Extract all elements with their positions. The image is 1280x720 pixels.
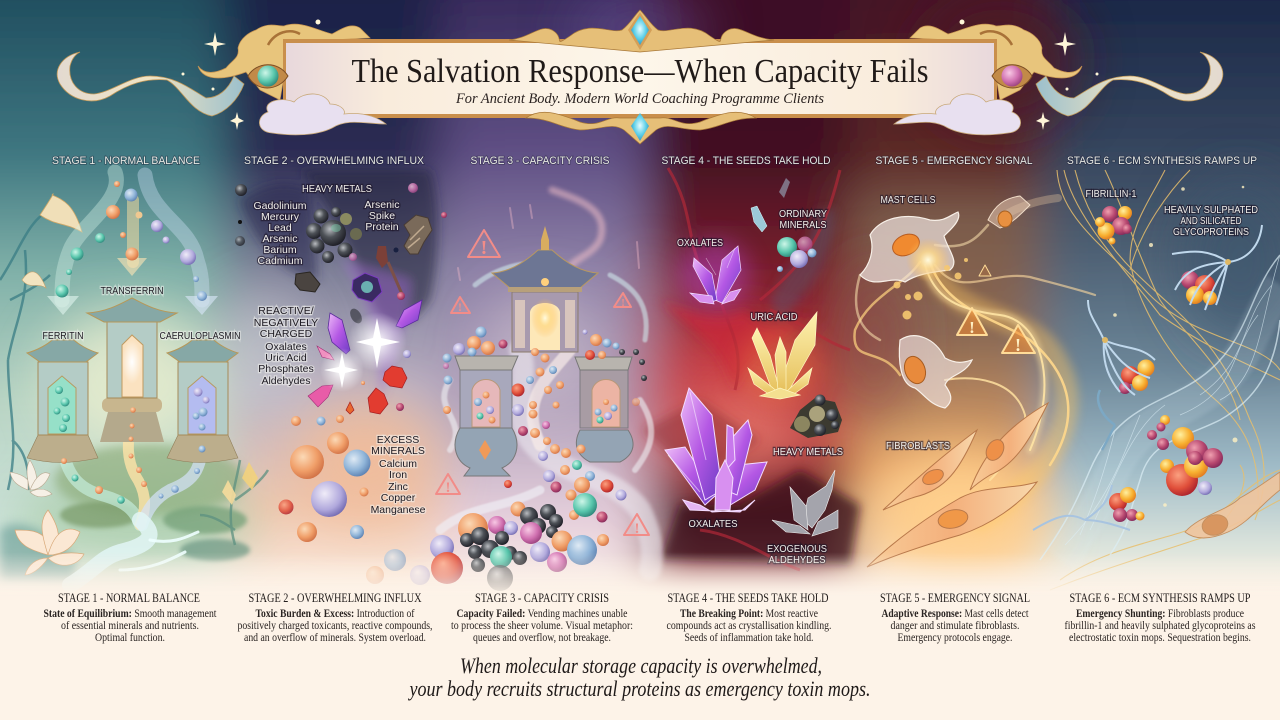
flow streams into stores xyxy=(62,172,202,585)
labels: ORDINARY xyxy=(779,208,827,220)
panel: stage 5 emergency signal xyxy=(854,194,1095,567)
labels: Arsenic xyxy=(364,199,400,211)
labels xyxy=(880,194,950,452)
labels: AND SILICATED xyxy=(1180,215,1242,227)
bottom fade into cream xyxy=(0,552,1280,596)
cloud: right xyxy=(894,94,1021,135)
warning marks xyxy=(969,318,1021,355)
caption: stage 1: STAGE 1 - NORMAL BALANCE xyxy=(58,591,200,605)
caption: stage 4: compounds act as crystallisation kindling. xyxy=(666,620,832,632)
pavilion: caeruloplasmin xyxy=(167,340,238,462)
caption: stage 3 xyxy=(451,591,633,644)
panel: stage 1 normal balance xyxy=(0,172,268,585)
labels: Arsenic xyxy=(262,233,298,245)
caption: stage 5: STAGE 5 - EMERGENCY SIGNAL xyxy=(880,591,1030,605)
caption: stage 3: STAGE 3 - CAPACITY CRISIS xyxy=(475,591,609,605)
labels: FIBRILLIN-1 xyxy=(1086,188,1137,200)
caption: stage 2: Toxic Burden & Excess: Introduction of xyxy=(256,608,415,620)
arrowheads xyxy=(47,258,218,315)
labels: MINERALS xyxy=(371,445,425,457)
labels xyxy=(1086,188,1258,238)
labels: Copper xyxy=(381,492,416,504)
fibroblasts xyxy=(867,403,1048,567)
purple crystals xyxy=(328,300,422,354)
mast cell: lower xyxy=(899,336,972,408)
minerals in transit xyxy=(56,181,207,504)
caption: stage 2: positively charged toxicants, reactive compounds, xyxy=(238,620,433,632)
mesh net xyxy=(1040,255,1280,560)
caption: stage 1: Optimal function. xyxy=(95,632,165,644)
labels: Iron xyxy=(389,469,407,481)
caption: stage 6: Emergency Shunting: Fibroblasts produce xyxy=(1076,608,1244,620)
caption: stage 2 xyxy=(238,591,433,644)
pavilion: transferrin xyxy=(87,298,177,442)
pink shards xyxy=(308,346,334,407)
closing statement: When molecular storage capacity is overwhelmed, xyxy=(460,653,822,678)
caption: stage 6: fibrillin-1 and heavily sulphated glycoproteins as xyxy=(1064,620,1256,632)
mast cell: distant xyxy=(988,196,1030,228)
glycoprotein mop: lower xyxy=(1033,390,1144,530)
granules xyxy=(894,258,968,320)
labels: OXALATES xyxy=(677,237,723,249)
mast cell: large xyxy=(860,212,959,282)
caption: stage 6 xyxy=(1064,591,1256,644)
labels: URIC ACID xyxy=(750,311,798,323)
caption: stage 5: Emergency protocols engage. xyxy=(898,632,1013,644)
labels: ALDEHYDES xyxy=(768,554,826,566)
caption: stage 2: STAGE 2 - OVERWHELMING INFLUX xyxy=(248,591,422,605)
warning triangles xyxy=(436,230,649,535)
labels: HEAVY METALS xyxy=(302,183,372,195)
red clusters xyxy=(346,366,407,414)
excess mineral spheres xyxy=(278,350,430,585)
labels: MAST CELLS xyxy=(880,194,936,206)
pagoda lantern xyxy=(492,226,598,352)
oxalate crystal: large xyxy=(665,388,767,512)
labels: REACTIVE/ xyxy=(258,305,314,317)
ornament: top xyxy=(509,10,774,52)
labels xyxy=(677,208,843,566)
uric acid crystal xyxy=(748,312,817,399)
gold flourish: left xyxy=(198,24,370,100)
caption: stage 4: Seeds of inflammation take hold. xyxy=(684,632,814,644)
pile of spheres xyxy=(430,493,609,591)
cloud: left xyxy=(259,94,386,135)
labels: Spike xyxy=(369,210,395,222)
spike protein fragment xyxy=(404,215,432,254)
warning marks: ! xyxy=(1015,335,1021,355)
sparkles xyxy=(182,20,1098,130)
storage jar: left xyxy=(455,356,518,476)
closing statement xyxy=(408,653,870,701)
swirling smoke xyxy=(440,190,652,570)
labels: Protein xyxy=(365,221,399,233)
subtitle: For Ancient Body. Modern World Coaching Programme Clients xyxy=(455,91,824,107)
labels: Uric Acid xyxy=(265,352,307,364)
panel: stage 3 capacity crisis xyxy=(430,190,652,591)
gold flourish: right xyxy=(910,24,1082,100)
warning marks: ! xyxy=(446,480,450,496)
labels: FIBROBLASTS xyxy=(886,440,950,452)
stage headings, top row: STAGE 2 - OVERWHELMING INFLUX xyxy=(244,155,425,167)
burst stars xyxy=(320,312,407,392)
labels: Mercury xyxy=(261,211,300,223)
fibrillin-1 cluster xyxy=(1095,206,1132,244)
labels: FERRITIN xyxy=(42,330,84,342)
storage jar: right xyxy=(575,357,633,462)
labels: HEAVILY SULPHATED xyxy=(1164,204,1258,216)
labels: Lead xyxy=(268,222,292,234)
caption: stage 4: The Breaking Point: Most reactive xyxy=(680,608,818,620)
labels: Manganese xyxy=(371,504,426,516)
labels: Zinc xyxy=(388,481,408,493)
labels xyxy=(42,285,240,342)
labels: OXALATES xyxy=(688,518,738,530)
labels: EXCESS xyxy=(377,434,419,446)
caption: stage 4: STAGE 4 - THE SEEDS TAKE HOLD xyxy=(668,591,829,605)
labels: Cadmium xyxy=(258,255,303,267)
stage headings, top row: STAGE 4 - THE SEEDS TAKE HOLD xyxy=(662,155,831,167)
glowing backdrop xyxy=(680,240,822,403)
caption: stage 1: of essential minerals and nutrients. xyxy=(61,620,199,632)
labels: Gadolinium xyxy=(253,200,307,212)
ornament: bottom xyxy=(526,112,756,144)
aldehydes crystal xyxy=(772,470,838,536)
small drifting particles xyxy=(235,183,447,300)
labels: EXOGENOUS xyxy=(767,543,827,555)
warning marks: ! xyxy=(621,298,625,309)
ordinary minerals xyxy=(751,178,816,272)
warning triangles xyxy=(957,265,1035,353)
caption: stage 1 xyxy=(44,591,217,644)
caption: stage 5: danger and stimulate fibroblasts. xyxy=(890,620,1020,632)
caption: stage 3: queues and overflow, not breakage. xyxy=(473,632,611,644)
meadow and plants xyxy=(0,194,268,580)
stage headings, top row: STAGE 5 - EMERGENCY SIGNAL xyxy=(876,155,1032,167)
caption: stage 6: electrostatic toxin mops. Sequestration begins. xyxy=(1069,632,1251,644)
sequestered cluster: large xyxy=(1147,415,1223,496)
warning marks: ! xyxy=(634,521,640,537)
banner plaque xyxy=(283,39,997,118)
overflowing spheres xyxy=(442,326,647,522)
gold fibres xyxy=(1050,170,1280,590)
caption: stage 1: State of Equilibrium: Smooth management xyxy=(44,608,217,620)
labels: Calcium xyxy=(379,458,417,470)
glycoprotein mop: middle xyxy=(1088,300,1155,395)
panel: stage 4 the seeds take hold xyxy=(665,178,843,566)
oxalate crystal: small xyxy=(690,246,741,304)
pavilion: ferritin xyxy=(27,340,98,462)
labels: MINERALS xyxy=(780,219,826,231)
gem: green xyxy=(248,65,288,88)
heavy metals rock xyxy=(790,394,842,438)
cream footer xyxy=(0,596,1280,720)
stage headings, top row xyxy=(52,155,1257,167)
caption: stage 5: Adaptive Response: Mast cells detect xyxy=(882,608,1029,620)
caption: stage 3: to process the sheer volume. Visual metaphor: xyxy=(451,620,633,632)
warning marks: ! xyxy=(969,318,975,337)
energy streams xyxy=(854,198,1095,520)
labels: TRANSFERRIN xyxy=(100,285,164,297)
labels: Barium xyxy=(263,244,297,256)
panel: stage 6 ecm synthesis ramps up xyxy=(1033,170,1280,590)
labels: NEGATIVELY xyxy=(254,317,318,329)
labels: CHARGED xyxy=(260,328,313,340)
caption: stage 4 xyxy=(666,591,832,644)
warning marks xyxy=(446,237,640,537)
glints xyxy=(1113,186,1244,507)
glycoprotein mop: upper xyxy=(1172,225,1262,310)
labels: Oxalates xyxy=(265,341,307,353)
dark fragments xyxy=(295,272,382,325)
stage headings, top row: STAGE 3 - CAPACITY CRISIS xyxy=(470,155,610,167)
ribbon: left xyxy=(57,52,244,116)
caption: stage 5 xyxy=(880,591,1030,644)
labels: Phosphates xyxy=(258,363,314,375)
heavy metal cluster xyxy=(306,207,362,263)
caption: stage 2: and an overflow of minerals. System overload. xyxy=(244,632,426,644)
fibroblast spindle xyxy=(1185,472,1280,538)
panel: stage 2 overwhelming influx xyxy=(235,183,447,585)
warning marks: ! xyxy=(458,300,462,314)
title: The Salvation Response—When Capacity Fails xyxy=(352,53,928,90)
gem: pink xyxy=(992,65,1032,88)
labels: Aldehydes xyxy=(261,375,311,387)
lotus flowers xyxy=(10,460,84,575)
warning marks: ! xyxy=(481,237,487,259)
labels: CAERULOPLASMIN xyxy=(160,330,240,342)
labels: GLYCOPROTEINS xyxy=(1173,226,1249,238)
labels xyxy=(253,183,426,516)
banner xyxy=(57,10,1223,144)
caption: stage 3: Capacity Failed: Vending machines unable xyxy=(456,608,628,620)
closing statement: your body recruits structural proteins as emergency toxin mops. xyxy=(408,676,870,701)
labels: HEAVY METALS xyxy=(773,446,843,458)
ribbon: right xyxy=(1036,52,1223,116)
stage headings, top row: STAGE 6 - ECM SYNTHESIS RAMPS UP xyxy=(1067,155,1257,167)
stage headings, top row: STAGE 1 - NORMAL BALANCE xyxy=(52,155,200,167)
